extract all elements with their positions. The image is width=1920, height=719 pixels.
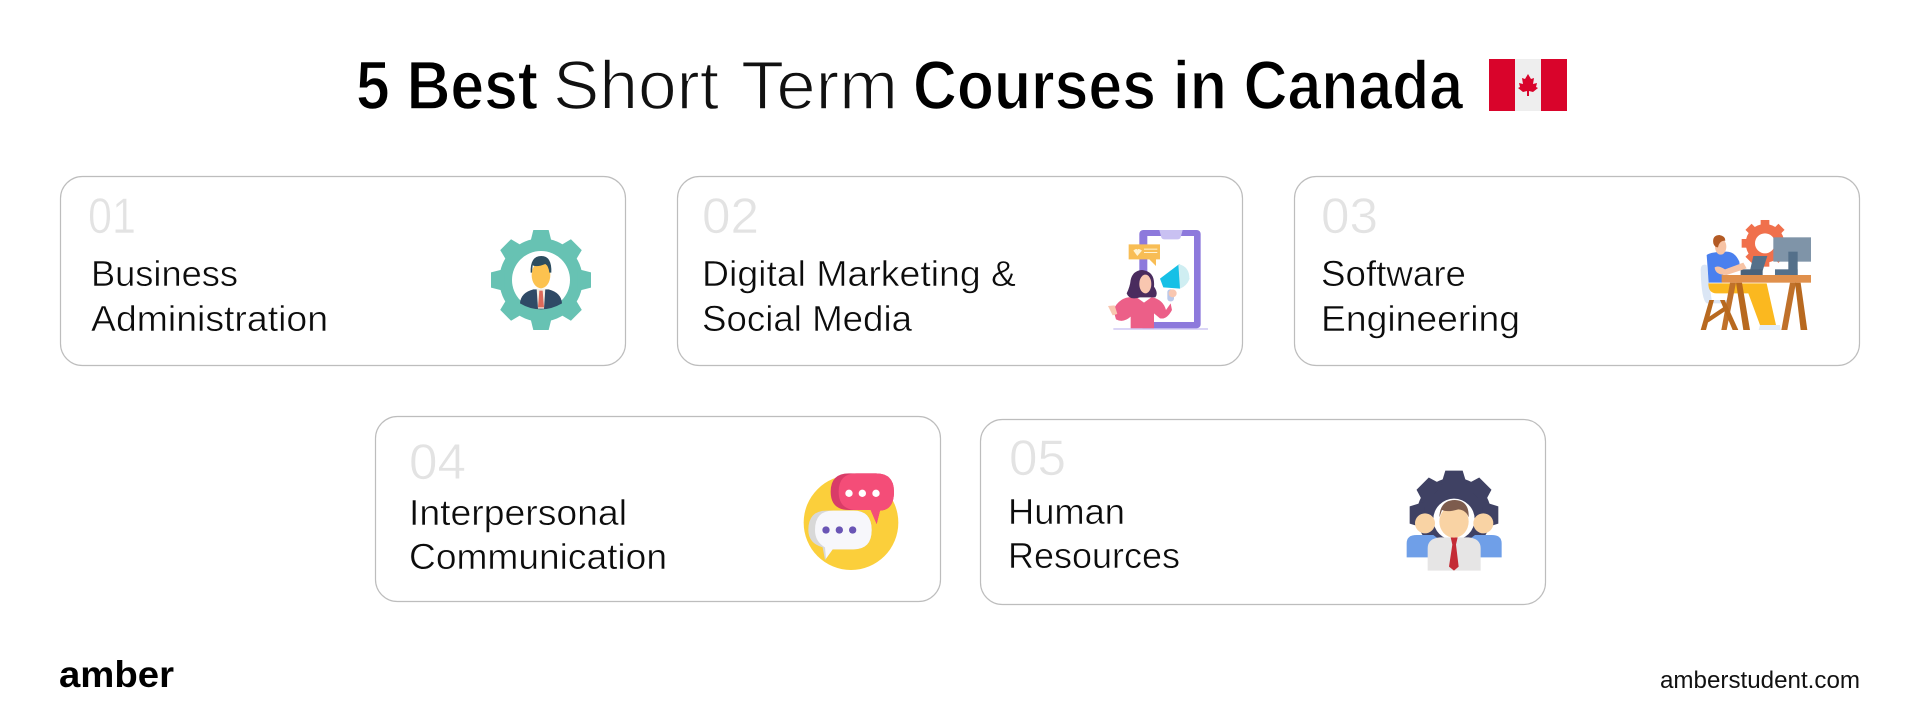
- course name: [409, 492, 667, 577]
- course name: [702, 253, 1016, 339]
- panel: Interpersonal Communication: [376, 416, 940, 602]
- number 03: 03: [1321, 188, 1378, 244]
- course name: Engineering: [1321, 298, 1520, 339]
- course name: Interpersonal: [409, 492, 627, 533]
- icon: developer at desk with gear: [1701, 220, 1811, 330]
- title: Short: [553, 47, 719, 124]
- panel: Digital Marketing & Social Media: [678, 176, 1242, 366]
- icon: woman with megaphone: [1108, 230, 1208, 330]
- title: 5 Best: [356, 47, 538, 124]
- panel: Software Engineering: [1294, 176, 1860, 366]
- website url: amberstudent.com: [1660, 667, 1860, 694]
- number 05: 05: [1009, 430, 1066, 486]
- course name: Business: [91, 253, 238, 294]
- course name: Communication: [409, 536, 667, 577]
- icon: gear with businessman: [491, 230, 591, 330]
- course name: Administration: [91, 298, 328, 339]
- course name: [1008, 491, 1180, 576]
- course name: Software: [1321, 253, 1466, 294]
- course name: [91, 253, 328, 339]
- number 02: 02: [702, 188, 759, 244]
- course name: Resources: [1008, 535, 1180, 576]
- number 01: 01: [88, 188, 136, 244]
- icon: team with gear: [1407, 471, 1502, 571]
- title: Term: [741, 47, 898, 124]
- course name: Digital Marketing &: [702, 253, 1016, 294]
- course name: Human: [1008, 491, 1125, 532]
- icon: chat bubbles: [804, 473, 898, 570]
- icon: Canadian flag: [1489, 59, 1567, 111]
- number 04: 04: [409, 434, 466, 490]
- panel: Human Resources: [980, 420, 1546, 604]
- panel: Business Administration: [60, 176, 626, 366]
- title: Courses in Canada: [913, 47, 1464, 124]
- course name: Social Media: [702, 298, 913, 339]
- course name: [1321, 253, 1520, 339]
- title: [356, 47, 1464, 124]
- logo: amber: amber: [59, 654, 174, 695]
